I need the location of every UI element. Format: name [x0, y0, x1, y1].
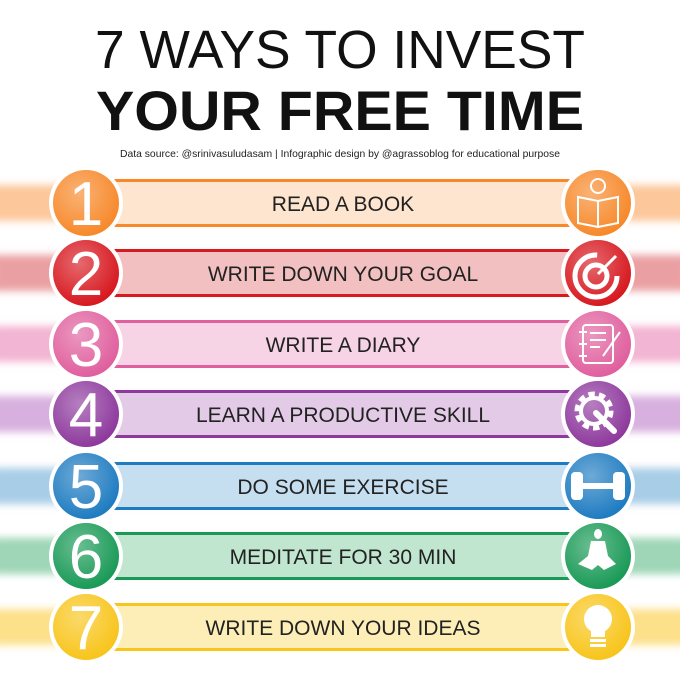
source text: Data source: @srinivasuludasam | Infographic design by @agrassoblog for educational purpose — [120, 148, 560, 160]
title: 7 WAYS TO INVEST — [95, 20, 585, 80]
row 4: skill — [0, 377, 680, 451]
title — [95, 20, 585, 142]
row 4: skill: 4 — [69, 381, 103, 450]
icon: gear — [578, 395, 614, 431]
row 2: goal: 2 — [69, 240, 103, 309]
row 6: meditate: MEDITATE FOR 30 MIN — [230, 546, 456, 569]
icon: target — [575, 255, 617, 297]
title: YOUR FREE TIME — [96, 79, 584, 142]
row 7: ideas: WRITE DOWN YOUR IDEAS — [206, 617, 480, 640]
icon: bulb — [584, 605, 612, 647]
row 2: goal: WRITE DOWN YOUR GOAL — [208, 263, 478, 286]
row 1: read a book: READ A BOOK — [272, 193, 414, 216]
row 3: diary — [0, 307, 680, 381]
row 3: diary: 3 — [69, 311, 103, 380]
row 5: exercise — [0, 449, 680, 523]
row 5: exercise: DO SOME EXERCISE — [237, 476, 449, 499]
row 7: ideas — [0, 590, 680, 664]
row 4: skill: LEARN A PRODUCTIVE SKILL — [196, 404, 490, 427]
icon: dumbbell — [571, 472, 625, 500]
icon: reader — [578, 179, 618, 227]
row 6: meditate: 6 — [69, 523, 103, 592]
row 7: ideas: 7 — [69, 594, 103, 663]
row 3: diary: WRITE A DIARY — [266, 334, 420, 357]
row 2: goal — [0, 236, 680, 310]
row 1: read a book — [0, 166, 680, 240]
row 1: read a book: 1 — [69, 170, 103, 239]
row 6: meditate — [0, 519, 680, 593]
icon: notebook — [579, 325, 620, 363]
row 5: exercise: 5 — [69, 453, 103, 522]
icon: meditation — [578, 529, 616, 570]
